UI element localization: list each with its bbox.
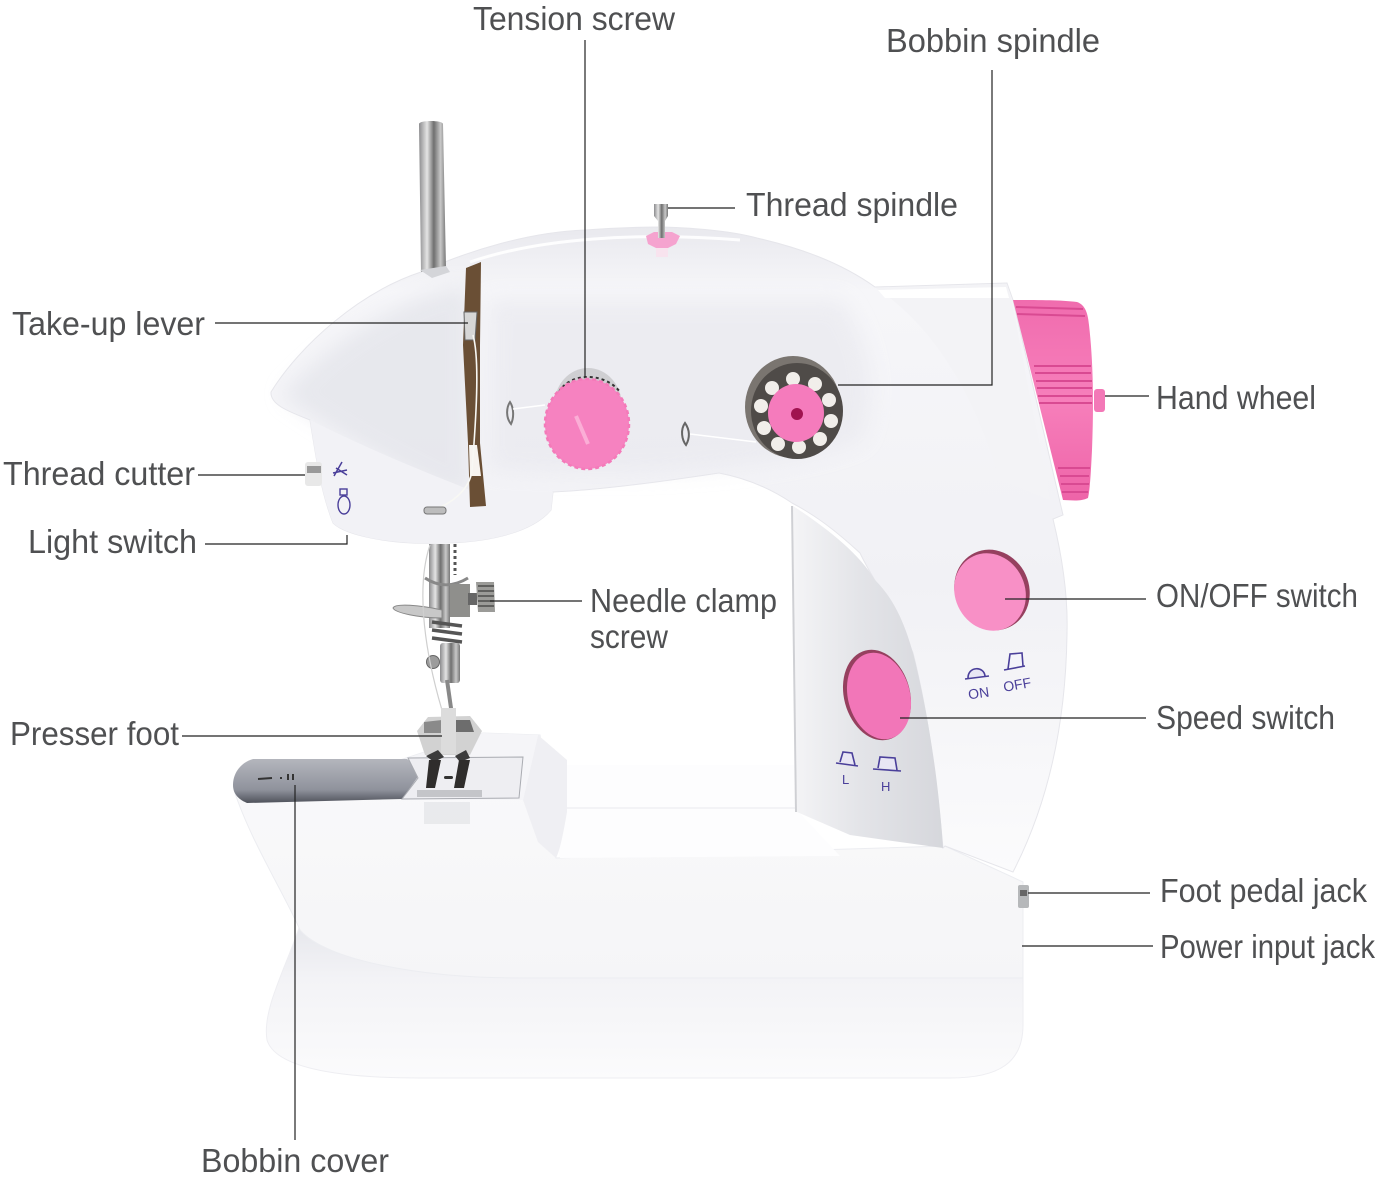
hand wheel — [1013, 300, 1105, 500]
top highlight — [470, 237, 740, 262]
icon: cutter mark — [333, 462, 347, 476]
thread cutter — [305, 462, 322, 486]
vertical spool pin — [419, 121, 450, 278]
hand wheel nub — [1094, 389, 1105, 412]
bobbin spindle — [745, 356, 843, 459]
leader lines — [182, 40, 1153, 1140]
icons: ON and OFF marks — [965, 653, 1032, 702]
label: Tension screw: Tension screw — [473, 0, 675, 37]
lower base foot — [266, 925, 1023, 1078]
icons: L and H speed marks: L — [842, 772, 849, 787]
label: Needle clamp screw: screw — [590, 618, 668, 655]
take-up lever — [464, 312, 477, 340]
upper base — [234, 733, 1023, 978]
ON/OFF switch — [941, 537, 1043, 643]
icons: ON and OFF marks: ON — [967, 684, 990, 702]
head shading — [282, 285, 470, 500]
needle plate — [402, 757, 523, 799]
bobbin cover — [233, 759, 417, 803]
platform side wall — [523, 735, 567, 858]
label: Needle clamp screw — [590, 582, 777, 655]
jack: foot pedal — [1018, 885, 1029, 908]
thumb screw — [424, 507, 446, 514]
platform top — [402, 733, 538, 800]
recess inner edge — [792, 506, 796, 812]
column recess — [793, 506, 943, 848]
base recess — [558, 765, 840, 858]
thread spindle — [646, 204, 680, 257]
label: Thread spindle: Thread spindle — [746, 186, 958, 223]
label: ON/OFF switch: ON/OFF switch — [1156, 577, 1358, 614]
thread guide left — [507, 402, 513, 424]
label: Needle clamp screw: Needle clamp — [590, 582, 777, 619]
take-up slot — [432, 262, 486, 510]
label: Thread cutter: Thread cutter — [3, 455, 195, 492]
needle clamp screw — [468, 582, 495, 612]
presser foot — [417, 708, 482, 797]
tension screw knob — [545, 368, 629, 469]
label: Take-up lever: Take-up lever — [12, 305, 205, 342]
bobbin cover mark — [258, 774, 293, 780]
head cylinder — [310, 420, 553, 543]
label: Speed switch: Speed switch — [1156, 699, 1335, 736]
plate reflection — [424, 802, 470, 824]
icons: L and H speed marks — [836, 752, 901, 794]
icon: light bulb mark — [338, 489, 350, 514]
label: Presser foot: Presser foot — [10, 715, 179, 752]
main body — [271, 227, 1067, 872]
thread guide right — [682, 423, 689, 445]
icons: ON and OFF marks: OFF — [1002, 674, 1032, 695]
label: Hand wheel: Hand wheel — [1156, 379, 1316, 416]
icons: L and H speed marks: H — [881, 779, 890, 794]
label: Light switch: Light switch — [28, 523, 197, 560]
recess back line — [567, 807, 795, 809]
spring — [432, 622, 462, 642]
speed switch — [833, 642, 921, 748]
needle assembly — [393, 544, 495, 720]
sewing machine — [233, 121, 1105, 1078]
right housing panel — [876, 284, 1050, 500]
label: Bobbin spindle: Bobbin spindle — [886, 22, 1100, 59]
